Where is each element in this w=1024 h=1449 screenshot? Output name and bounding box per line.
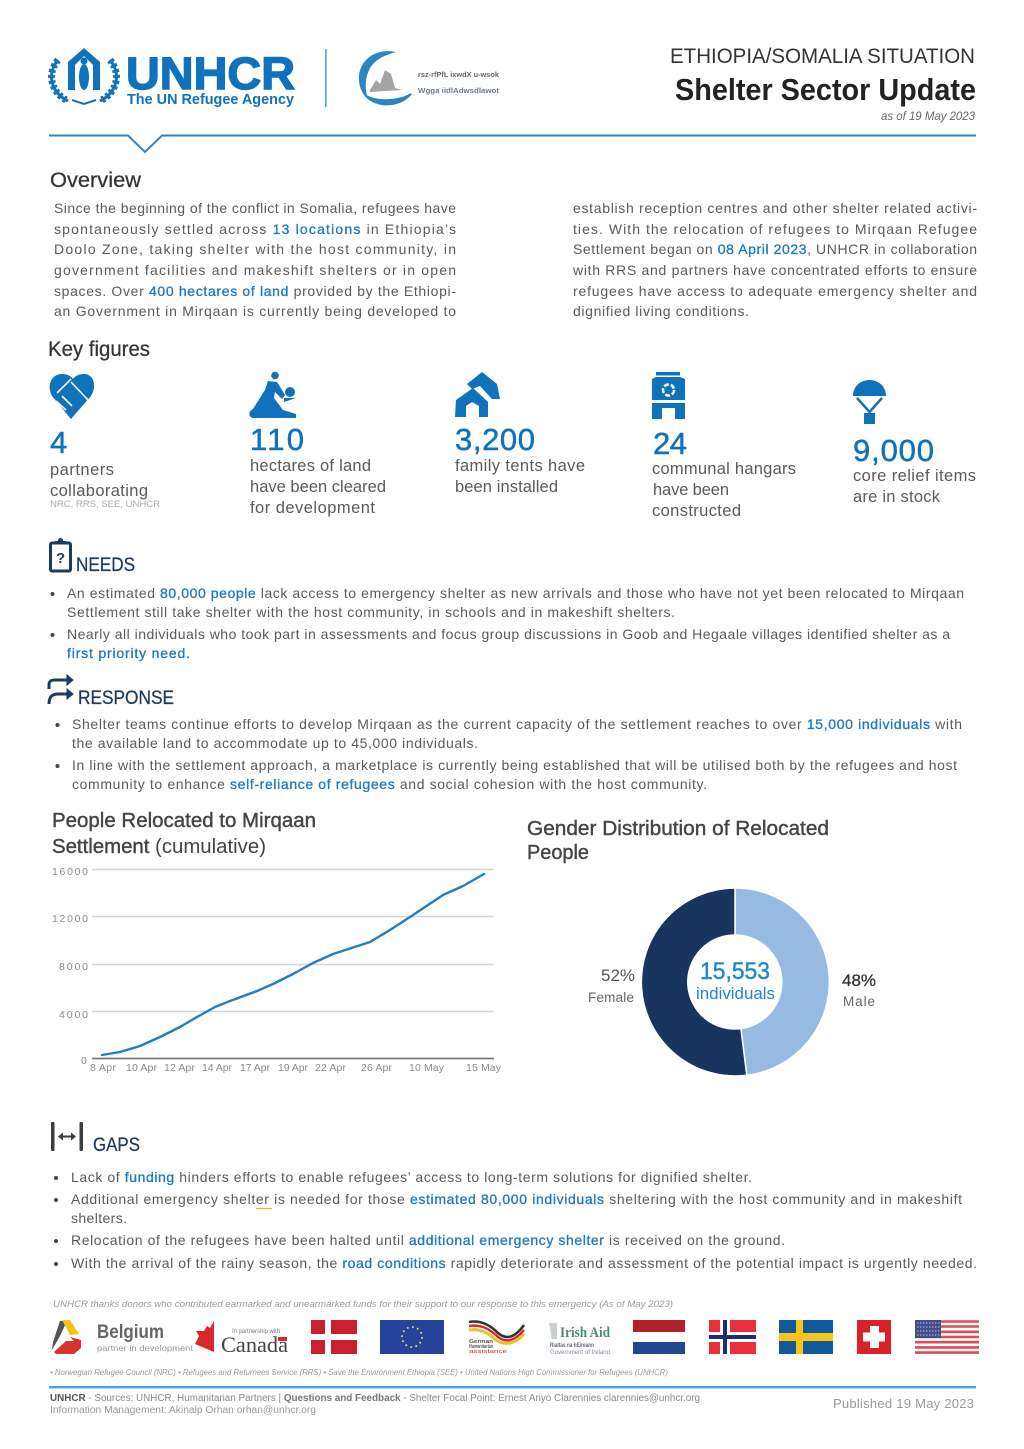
text block: overview left column xyxy=(54,200,456,319)
key figure: partners: 4 xyxy=(50,425,67,460)
flag: Netherlands xyxy=(633,1320,685,1354)
list: needs: An estimated 80,000 people lack access to emergency shelter as new arrivals and those who have not yet been relocated to Mirqaan xyxy=(67,585,964,601)
footer: sources and contacts: UNHCR - Sources: UNHCR, Humanitarian Partners | Questions and Feedback - Shelter Focal Point: Ernest Ariyo Clarennies clarennies@unhcr.org xyxy=(50,1393,700,1404)
heading: donut chart xyxy=(527,818,829,864)
chart: people relocated xyxy=(52,866,502,1074)
heading: donut chart: Gender Distribution of Relocated xyxy=(527,818,829,840)
key figure: communal hangars: 24 xyxy=(653,426,687,461)
chart: people relocated: 12 Apr xyxy=(164,1062,196,1074)
icon: gap arrows xyxy=(51,1122,83,1151)
logo: Germany xyxy=(469,1322,524,1355)
text block: overview left column: spaces. Over 400 hectares of land provided by the Ethiopi- xyxy=(54,283,456,299)
list: gaps: Relocation of the refugees have been halted until additional emergency shelter is received on the ground. xyxy=(71,1232,785,1248)
icon: parachute xyxy=(853,380,886,424)
logo: Canada xyxy=(195,1321,288,1357)
heading: response: RESPONSE xyxy=(78,688,174,709)
title block xyxy=(670,45,976,123)
flag: European Union xyxy=(380,1320,444,1354)
logo: Belgium xyxy=(52,1320,194,1354)
logo: Canada: In partnership with xyxy=(232,1329,280,1335)
segment: female 52% xyxy=(641,888,747,1076)
text block: overview right column: establish reception centres and other shelter related activi- xyxy=(573,200,977,216)
chart: people relocated: 14 Apr xyxy=(202,1062,232,1074)
chart: gender donut: individuals xyxy=(696,985,775,1003)
key figure: partners: partners xyxy=(50,461,114,479)
logo: Germany: German xyxy=(469,1339,493,1345)
chart: gender donut xyxy=(588,888,876,1076)
footer: sources and contacts: Information Management: Akinalp Orhan orhan@unhcr.org xyxy=(50,1405,316,1416)
logo: Irish Aid: Rialtas na hEireann xyxy=(550,1343,594,1349)
icon: hangar xyxy=(652,372,685,419)
panel: needs xyxy=(50,538,964,661)
heading: key figures: Key figures xyxy=(48,338,150,361)
key figure: communal hangars: constructed xyxy=(652,502,741,520)
logo: UNHCR: UNHCR xyxy=(126,48,295,99)
icon: clipboard question: ? xyxy=(56,550,65,567)
flag: Denmark xyxy=(311,1320,357,1354)
flag: Norway xyxy=(709,1320,756,1354)
chart: people relocated: 10 May xyxy=(409,1062,445,1074)
text: donor thanks: UNHCR thanks donors who contributed earmarked and unearmarked funds for their support to our response to this emergency (As of May 2023) xyxy=(53,1299,673,1309)
logo: partner agency: rsz-rfPfL ixwdX u-wsok xyxy=(418,72,499,79)
logo: Belgium: partner in development xyxy=(97,1344,194,1353)
heading: line chart xyxy=(52,810,316,858)
list: response: community to enhance self-reliance of refugees and social cohesion with the host community. xyxy=(72,776,707,792)
logo: Belgium: Belgium xyxy=(97,1322,164,1343)
chart: gender donut: 52% xyxy=(601,967,635,985)
list: needs: Nearly all individuals who took part in assessments and focus group discussions in Goob and Hegaale villages identified shelter as a xyxy=(67,626,950,642)
footer: publication date: Published 19 May 2023 xyxy=(833,1396,974,1411)
key figure: family tents: family tents have xyxy=(455,457,585,475)
key figure: communal hangars xyxy=(652,372,796,520)
chart: gender donut: 48% xyxy=(842,972,876,990)
logo: Germany: Humanitarian xyxy=(469,1344,493,1350)
panel: key figures xyxy=(48,338,976,520)
chart: people relocated: 0 xyxy=(81,1055,87,1067)
key figure: core relief items: are in stock xyxy=(853,488,941,506)
panel: donor logos xyxy=(52,1320,979,1357)
heading: line chart: Settlement (cumulative) xyxy=(52,836,266,858)
key figure: partners: collaborating xyxy=(50,482,148,500)
panel: overview xyxy=(50,169,977,319)
key figure: family tents: 3,200 xyxy=(455,422,535,457)
logo: Irish Aid: Irish Aid xyxy=(560,1325,611,1341)
chart: people relocated: 10 Apr xyxy=(126,1062,158,1074)
key figure: core relief items: core relief items xyxy=(853,467,976,485)
heading: gaps: GAPS xyxy=(93,1135,140,1156)
key figure: partners xyxy=(50,374,160,510)
heading: donut chart: People xyxy=(527,842,589,864)
text block: overview right column: ties. With the relocation of refugees to Mirqaan Refugee xyxy=(573,221,977,237)
list: response: Shelter teams continue efforts to develop Mirqaan as the current capacity of the settlement reaches to over 15,000 individuals with xyxy=(72,716,962,732)
list: response: In line with the settlement approach, a marketplace is currently being established that will be utilised both by the refugees and host xyxy=(72,757,957,773)
chart: people relocated: 16000 xyxy=(52,866,88,878)
icon: heart handshake xyxy=(50,374,94,419)
chart: people relocated: 22 Apr xyxy=(315,1062,346,1074)
panel: line chart xyxy=(52,810,502,1074)
key figure: core relief items: 9,000 xyxy=(853,433,934,468)
key figure: hectares: 110 xyxy=(250,422,304,457)
icon: person clearing land xyxy=(249,372,296,418)
footer: sources and contacts xyxy=(50,1393,700,1416)
flag: Switzerland xyxy=(857,1320,891,1354)
title block: ETHIOPIA/SOMALIA SITUATION xyxy=(670,45,975,68)
chart: people relocated: 8000 xyxy=(59,961,88,973)
text: partner list: • Norwegian Refugee Council (NRC) • Refugees and Returnees Service (RRS) • Save the Environment Ethiopia (SEE) • United Nations High Commissioner for Refugees (UNHCR) xyxy=(50,1367,668,1377)
list: gaps: Lack of funding hinders efforts to enable refugees’ access to long-term solutions for dignified shelter. xyxy=(71,1169,752,1185)
title block: Shelter Sector Update xyxy=(675,72,976,107)
chart: gender donut: Male xyxy=(843,994,875,1009)
key figure: communal hangars: have been xyxy=(653,481,729,499)
list: needs: first priority need. xyxy=(67,645,190,661)
key figure: communal hangars: communal hangars xyxy=(652,460,796,478)
logo: partner agency xyxy=(359,51,500,104)
flag: Sweden xyxy=(779,1320,833,1354)
icon: clipboard question xyxy=(50,538,70,571)
logo: partner agency: Wgga iidlAdwsdlawot xyxy=(418,86,500,95)
panel: gaps xyxy=(51,1122,977,1271)
chart: people relocated: 8 Apr xyxy=(90,1062,116,1074)
heading: overview: Overview xyxy=(50,169,142,192)
heading: line chart: People Relocated to Mirqaan xyxy=(52,810,316,832)
list: needs xyxy=(50,585,964,661)
chart: gender donut: 15,553 xyxy=(700,958,770,985)
logo: Germany: assistance xyxy=(469,1349,507,1355)
text block: overview right column: refugees have access to adequate emergency shelter and xyxy=(573,283,977,299)
text block: overview left column: Since the beginning of the conflict in Somalia, refugees have xyxy=(54,200,456,216)
key figure: family tents xyxy=(455,372,585,496)
flag: United States xyxy=(915,1320,979,1354)
icon: response arrows xyxy=(49,675,73,704)
text block: overview right column xyxy=(572,200,977,319)
chart: people relocated: 26 Apr xyxy=(361,1062,392,1074)
icon: tents xyxy=(455,372,500,417)
chart: people relocated: 4000 xyxy=(59,1009,88,1021)
list: response xyxy=(56,716,962,792)
title block: as of 19 May 2023 xyxy=(881,111,976,123)
text block: overview right column: Settlement began on 08 April 2023, UNHCR in collaboration xyxy=(573,241,977,257)
key figure: hectares: have been cleared xyxy=(250,478,386,496)
text block: overview left column: an Government in Mirqaan is currently being developed to xyxy=(54,303,456,319)
panel: donut chart xyxy=(527,818,876,1076)
list: gaps xyxy=(54,1169,977,1271)
chart: people relocated: 17 Apr xyxy=(240,1062,270,1074)
text block: overview right column: dignified living conditions. xyxy=(573,303,749,319)
logo: UNHCR xyxy=(52,48,295,108)
key figure: hectares: hectares of land xyxy=(250,457,371,475)
logo: UNHCR: The UN Refugee Agency xyxy=(127,92,294,108)
key figure: core relief items xyxy=(853,380,976,506)
key figure: family tents: been installed xyxy=(455,478,558,496)
text block: overview left column: government facilities and makeshift shelters or in open xyxy=(54,262,456,278)
list: gaps: shelters. xyxy=(71,1210,127,1226)
chart: gender donut: Female xyxy=(588,990,634,1005)
text block: overview left column: Doolo Zone, taking shelter with the host community, in xyxy=(54,241,456,257)
logo: Irish Aid xyxy=(549,1323,611,1356)
line: cumulative relocations xyxy=(102,874,484,1055)
segment: male 48% xyxy=(735,888,829,1075)
list: needs: Settlement still take shelter with the host community, in schools and in makeshift shelters. xyxy=(67,604,675,620)
logo: Irish Aid: Government of Ireland xyxy=(550,1350,610,1356)
icon: UNHCR emblem xyxy=(52,48,116,104)
text block: overview left column: spontaneously settled across 13 locations in Ethiopia’s xyxy=(54,221,456,237)
list: gaps: Additional emergency shelter is needed for those estimated 80,000 individuals sheltering with the host community and in makeshift xyxy=(71,1191,962,1207)
key figure: partners: NRC, RRS, SEE, UNHCR xyxy=(50,499,160,510)
key figure: hectares xyxy=(249,372,386,517)
panel: response xyxy=(49,675,962,792)
chart: people relocated: 19 Apr xyxy=(278,1062,308,1074)
logo: Canada: Canada xyxy=(221,1332,288,1357)
chart: people relocated: 15 May xyxy=(466,1062,502,1074)
text block: overview right column: with RRS and partners have concentrated efforts to ensure xyxy=(572,262,977,278)
key figure: hectares: for development xyxy=(250,499,375,517)
list: gaps: With the arrival of the rainy season, the road conditions rapidly deteriorate and assessment of the potential impact is urgently needed. xyxy=(71,1255,977,1271)
list: response: the available land to accommodate up to 45,000 individuals. xyxy=(72,735,478,751)
chart: people relocated: 12000 xyxy=(52,913,88,925)
heading: needs: NEEDS xyxy=(76,555,135,576)
